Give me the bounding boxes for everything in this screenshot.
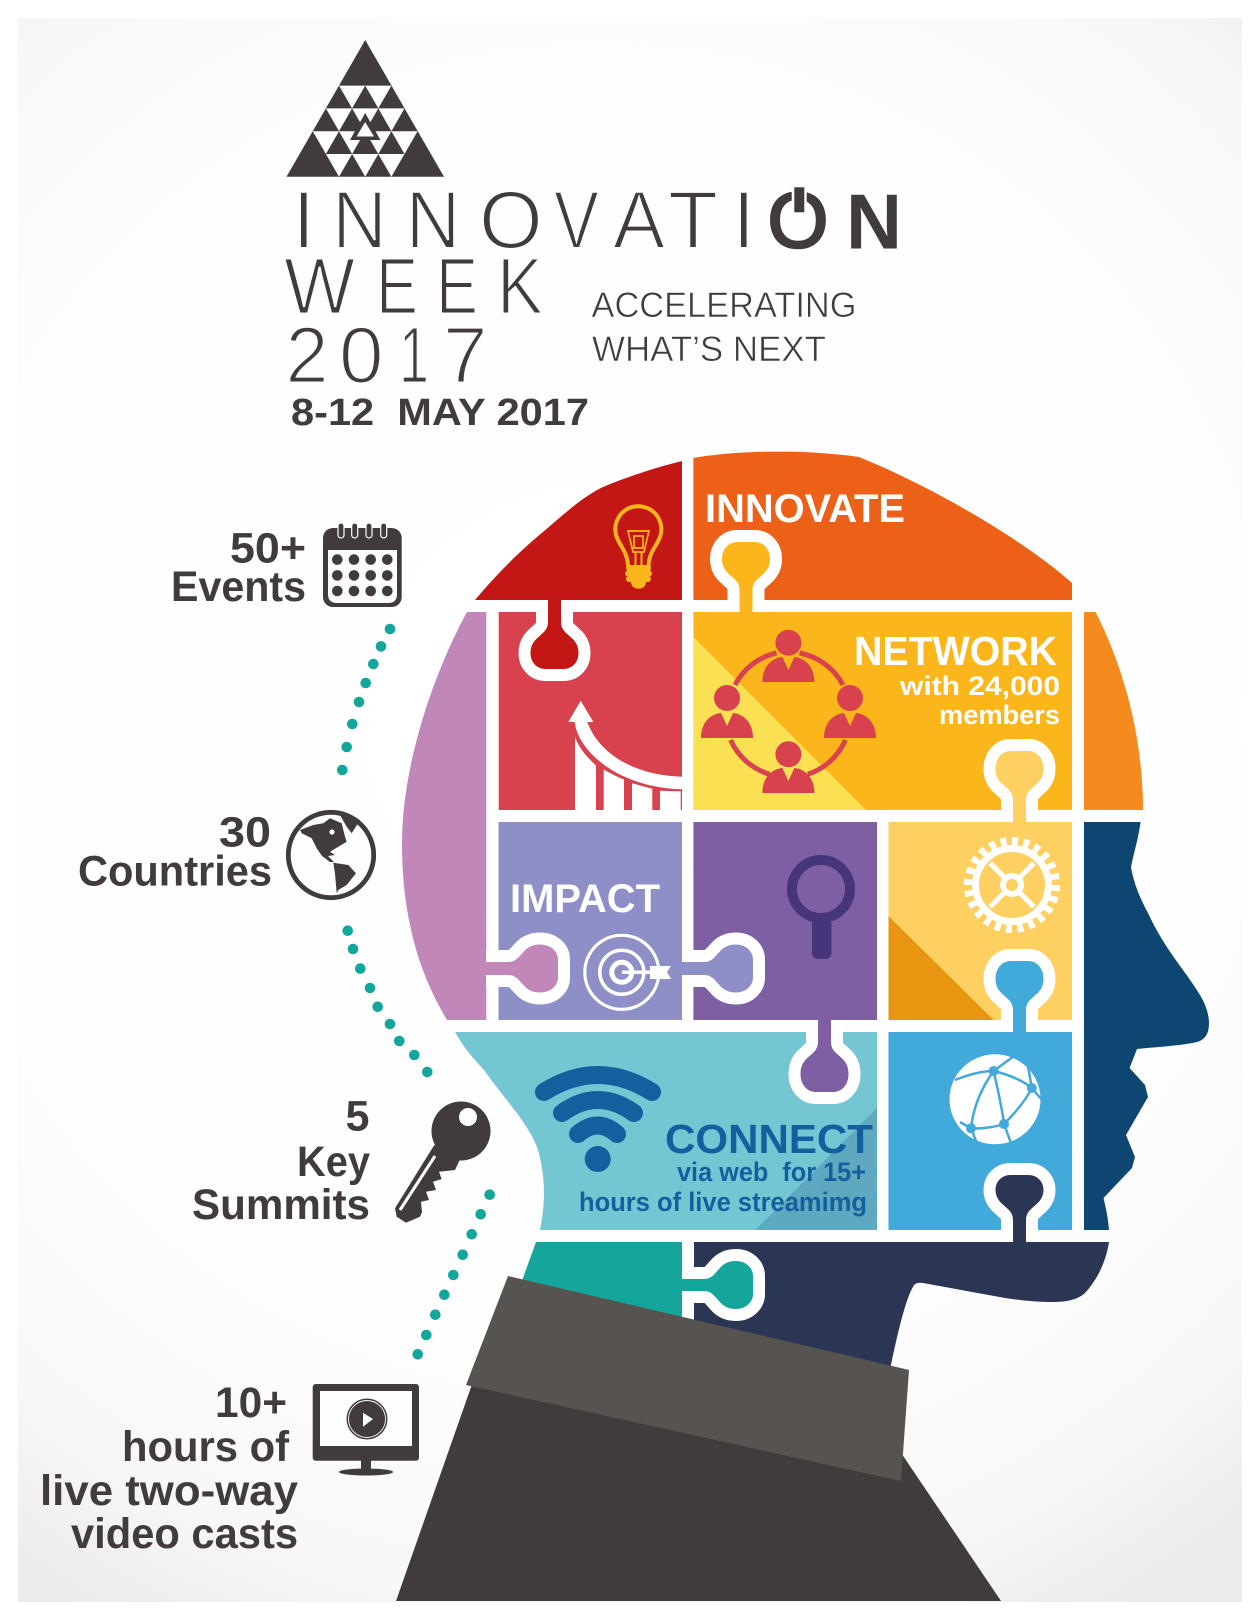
stat: 5 key summits: Key xyxy=(297,1138,370,1186)
dotted connector 3 xyxy=(412,1189,495,1360)
stat: 10+ hours of live two-way video casts: hours of xyxy=(122,1423,290,1471)
piece: violet impact xyxy=(498,822,682,1020)
piece: orange innovate xyxy=(693,452,1072,600)
stat: 5 key summits: 5 xyxy=(346,1093,370,1141)
piece: orange right xyxy=(1084,612,1143,810)
title: INNOVATION: O xyxy=(768,176,828,264)
tab: purple xyxy=(800,1020,848,1092)
title: INNOVATION: N xyxy=(846,177,902,265)
stat: 10+ hours of live two-way video casts: video casts xyxy=(71,1510,298,1558)
tab: red xyxy=(530,600,578,669)
icon: globe network xyxy=(950,1054,1042,1146)
label: with 24,000 members: members xyxy=(939,700,1060,730)
icon: key xyxy=(395,1102,490,1223)
label: connect details xyxy=(579,1157,867,1217)
title: INNOVATION: N xyxy=(332,175,387,266)
teal shade xyxy=(756,1108,877,1230)
icon: calendar xyxy=(323,523,402,607)
icon: light bulb xyxy=(615,506,661,589)
piece: light teal connect xyxy=(455,1032,877,1230)
piece: light red xyxy=(499,612,682,810)
label: INNOVATE: INNOVATE xyxy=(705,487,905,531)
stat: 50+ events xyxy=(171,524,306,611)
dotted connector 1 xyxy=(337,624,395,775)
piece: purple xyxy=(693,822,877,1020)
stat: 10+ hours of live two-way video casts: 10+ xyxy=(215,1379,287,1427)
body: jacket xyxy=(396,1380,1001,1601)
piece: pink left xyxy=(402,612,486,1020)
icon: magnifier xyxy=(792,860,850,959)
tab: navy xyxy=(996,1175,1044,1242)
stat: 50+ events: Events xyxy=(171,563,306,611)
stat: 10+ hours of live two-way video casts: live two-way xyxy=(40,1467,298,1515)
title: 2017: 2 xyxy=(286,310,328,400)
title: INNOVATION: V xyxy=(554,175,599,266)
tab: yellow xyxy=(722,542,770,612)
pale yellow triangle xyxy=(693,637,866,810)
logo: triangle mark xyxy=(286,40,444,177)
title: INNOVATION: T xyxy=(668,175,718,266)
stat: 30 countries: 30 xyxy=(219,808,271,856)
stat: 5 key summits xyxy=(192,1093,370,1229)
stat: 10+ hours of live two-way video casts xyxy=(40,1379,298,1558)
title: 2017: 0 xyxy=(339,310,384,400)
tab: violet xyxy=(682,944,753,992)
title: WEEK: E xyxy=(436,242,478,330)
icon: video monitor xyxy=(313,1384,419,1476)
label: with 24,000 members: with 24,000 xyxy=(899,671,1060,701)
title: WEEK: W xyxy=(284,242,355,330)
tab: teal xyxy=(682,1261,753,1309)
label: NETWORK: NETWORK xyxy=(854,628,1057,674)
title: 2017 xyxy=(286,310,488,400)
stat: 50+ events: 50+ xyxy=(230,524,306,572)
tagline xyxy=(592,286,856,369)
tagline: WHAT’S NEXT xyxy=(592,330,826,369)
icon: target xyxy=(585,935,671,1009)
label: connect details: via web for 15+ xyxy=(677,1157,866,1187)
piece: yellow network xyxy=(693,612,1072,810)
title: INNOVATION: I xyxy=(292,175,315,266)
title: 2017: 7 xyxy=(443,310,488,400)
piece: navy jaw xyxy=(694,1242,1109,1375)
icon: wifi xyxy=(544,1075,652,1172)
dotted connector 2 xyxy=(342,925,433,1077)
tab: light yellow xyxy=(996,751,1044,822)
icon: world globe xyxy=(288,812,374,898)
label: connect details: hours of live streamimg xyxy=(579,1187,867,1217)
stat: 30 countries xyxy=(78,808,272,896)
date: 8-12 MAY 2017 xyxy=(291,392,589,434)
title: WEEK: K xyxy=(497,242,543,330)
title: INNOVATION: O xyxy=(479,175,543,266)
icon: growth arrow xyxy=(568,701,682,812)
piece: teal neck xyxy=(515,1242,682,1340)
title: INNOVATION: A xyxy=(613,175,665,266)
piece: dark blue face xyxy=(1084,822,1209,1230)
label: CONNECT: CONNECT xyxy=(665,1116,873,1162)
tagline: ACCELERATING xyxy=(592,286,856,325)
piece: blue xyxy=(888,1032,1072,1230)
body: collar xyxy=(466,1276,909,1481)
dark yellow triangle xyxy=(888,916,994,1020)
icon: people network xyxy=(701,630,876,793)
piece: light yellow xyxy=(888,822,1072,1020)
label: with 24,000 members xyxy=(899,671,1060,730)
title: INNOVATION: N xyxy=(406,175,460,266)
tab: blue xyxy=(996,961,1044,1032)
title: 2017: 1 xyxy=(399,310,429,400)
icon: gear xyxy=(968,841,1056,929)
tab: pink xyxy=(486,944,558,992)
title: INNOVATION: I xyxy=(732,175,755,266)
piece: red top-left xyxy=(475,461,682,600)
title: WEEK: E xyxy=(376,242,418,330)
head puzzle xyxy=(402,452,1209,1375)
label: IMPACT: IMPACT xyxy=(510,877,660,921)
title: WEEK xyxy=(284,242,543,330)
title: INNOVATION xyxy=(292,175,902,266)
stat: 5 key summits: Summits xyxy=(192,1181,370,1229)
stat: 30 countries: Countries xyxy=(78,848,272,896)
